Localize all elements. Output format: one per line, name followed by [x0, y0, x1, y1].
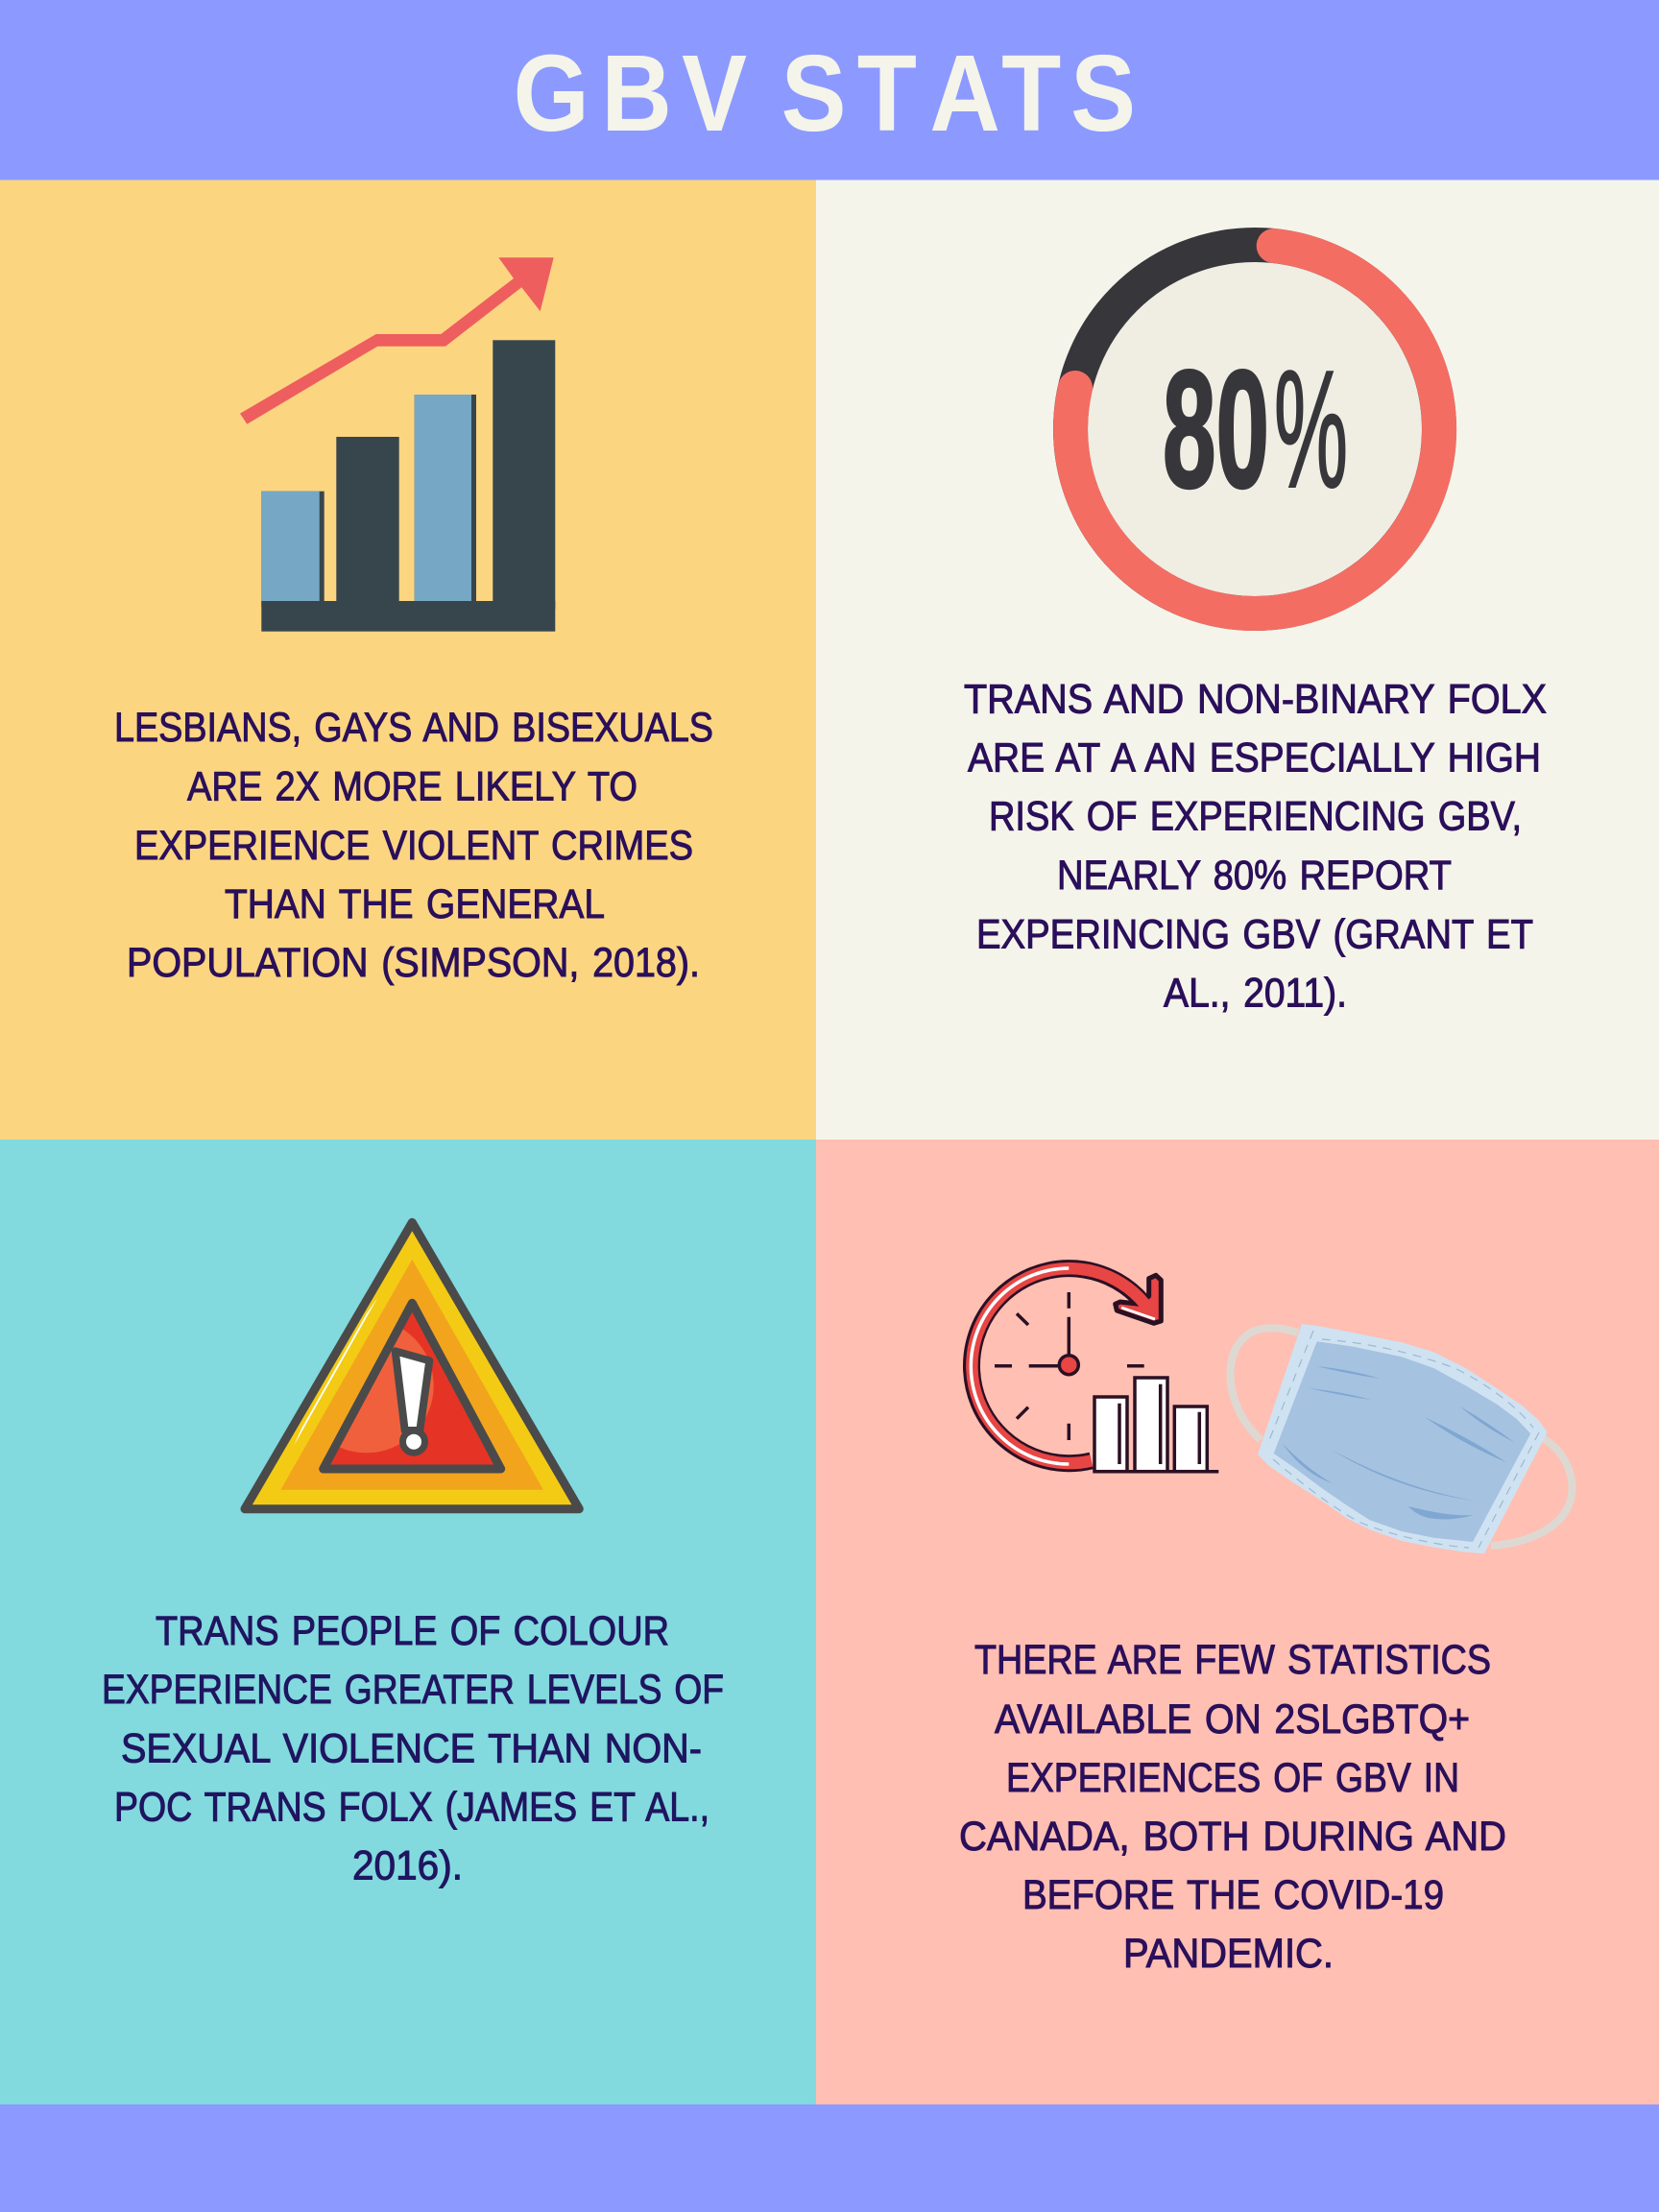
- icon: 80 percent donut chart: %: [1274, 335, 1348, 522]
- text block: [964, 676, 1547, 1016]
- text block: AL., 2011).: [1164, 970, 1347, 1016]
- text block: THAN THE GENERAL: [225, 881, 605, 927]
- text block: EXPERIENCES OF GBV IN: [1006, 1755, 1459, 1801]
- panel: few statistics available: [816, 1140, 1659, 2104]
- icon: 80 percent donut chart: 80: [1163, 335, 1269, 522]
- footer band: [0, 2104, 1659, 2212]
- panel: lesbians, gays and bisexuals statistic: [0, 180, 816, 1141]
- text block: EXPERIENCE GREATER LEVELS OF: [102, 1667, 724, 1713]
- text block: THERE ARE FEW STATISTICS: [974, 1637, 1491, 1683]
- text block: 2016).: [352, 1843, 463, 1889]
- title: GBV STATS: [514, 33, 1136, 154]
- text block: ARE AT A AN ESPECIALLY HIGH: [968, 735, 1541, 781]
- text block: PANDEMIC.: [1123, 1931, 1334, 1977]
- icon: surgical mask: [1230, 1324, 1573, 1553]
- icon: warning triangle: [245, 1222, 579, 1509]
- text block: [959, 1637, 1506, 1977]
- text block: TRANS PEOPLE OF COLOUR: [156, 1608, 669, 1654]
- text block: [114, 705, 713, 986]
- icon: clock with bar chart: [971, 1268, 1218, 1472]
- header band: [0, 0, 1659, 180]
- text block: [102, 1608, 724, 1889]
- text block: TRANS AND NON-BINARY FOLX: [964, 676, 1547, 722]
- icon: rising bar chart with arrow: [240, 257, 555, 632]
- panel: trans and non-binary statistic: [816, 180, 1659, 1141]
- text block: NEARLY 80% REPORT: [1057, 853, 1452, 899]
- panel: trans people of colour statistic: [0, 1140, 816, 2104]
- text block: EXPERIENCE VIOLENT CRIMES: [134, 823, 693, 869]
- text block: ARE 2X MORE LIKELY TO: [187, 764, 637, 810]
- text block: POC TRANS FOLX (JAMES ET AL.,: [114, 1784, 709, 1830]
- text block: CANADA, BOTH DURING AND: [959, 1814, 1506, 1860]
- text block: BEFORE THE COVID-19: [1022, 1872, 1444, 1918]
- text block: SEXUAL VIOLENCE THAN NON-: [121, 1726, 702, 1772]
- text block: LESBIANS, GAYS AND BISEXUALS: [114, 705, 713, 751]
- text block: RISK OF EXPERIENCING GBV,: [989, 793, 1522, 839]
- text block: EXPERINCING GBV (GRANT ET: [976, 912, 1533, 958]
- text block: AVAILABLE ON 2SLGBTQ+: [995, 1696, 1470, 1743]
- icon: 80 percent donut chart: [1070, 245, 1439, 613]
- text block: POPULATION (SIMPSON, 2018).: [127, 940, 700, 986]
